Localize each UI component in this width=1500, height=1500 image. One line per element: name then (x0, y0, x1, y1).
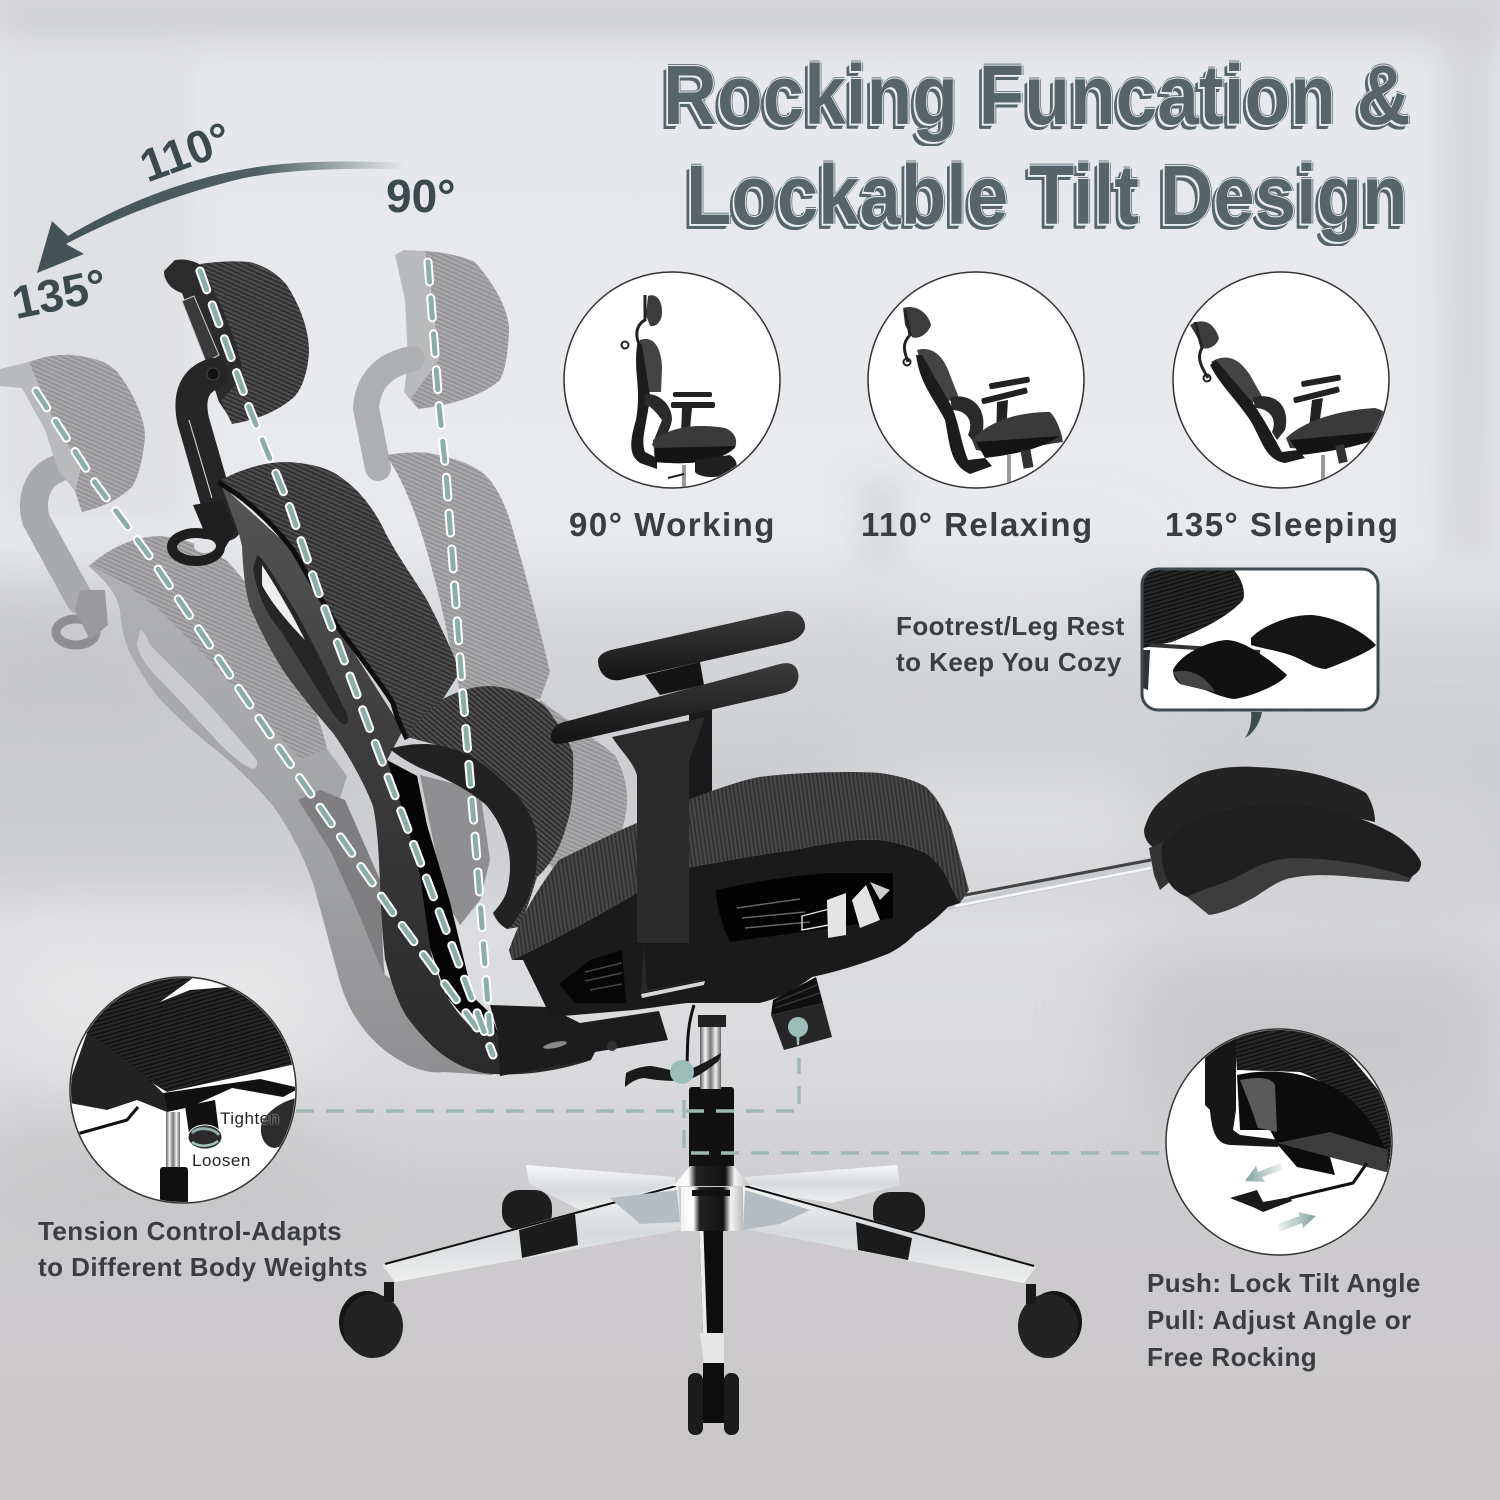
ghost frame 135 (87, 565, 493, 1075)
ghost lumbar 90 (520, 700, 627, 880)
tilt caption: Pull: Adjust Angle or (1147, 1305, 1412, 1335)
front caster (688, 1373, 703, 1435)
tension caption (38, 1216, 368, 1282)
rear right leg (745, 1165, 900, 1203)
ghost neck 90 (366, 359, 412, 468)
caption: working: 90° Working (569, 506, 776, 543)
dashed guide: 110 degree axis (200, 271, 493, 1055)
ghost chair: 90 degree position (366, 250, 627, 925)
back pad (1144, 767, 1375, 848)
headrest bracket (164, 259, 246, 424)
front center leg (698, 1188, 723, 1333)
seat pan (512, 840, 960, 1017)
main chair: 110 degree position (164, 259, 969, 1087)
gas lift and hub (689, 1015, 734, 1182)
inset rod (1150, 645, 1260, 652)
lever marker (670, 1060, 694, 1084)
angle label 110: 110° (133, 112, 238, 192)
title: Rocking Funcation & (663, 48, 1411, 142)
inset seat mesh (86, 978, 292, 1092)
inset right pad (1251, 615, 1376, 669)
front armrest post (612, 717, 705, 993)
ghost knob 135 (56, 590, 108, 645)
tension caption: Tension Control-Adapts (38, 1216, 342, 1246)
inset pan (1237, 1072, 1392, 1175)
ghost bracket 135 (0, 362, 82, 491)
rotation arrow (37, 161, 404, 273)
collar (698, 1015, 726, 1027)
caption: relaxing: 110° Relaxing (861, 506, 1094, 543)
mini chair circle: 135 degrees (1173, 272, 1403, 488)
tilt caption (1147, 1268, 1421, 1372)
ghost neck 135 (34, 469, 80, 600)
loosen label: Loosen (192, 1151, 251, 1170)
callout tail (1245, 712, 1262, 738)
tension knob marker (788, 1017, 808, 1045)
front right leg (740, 1183, 1036, 1283)
adjustment knob (172, 500, 236, 561)
push arrow (1245, 1163, 1283, 1182)
inset cable (77, 1107, 138, 1134)
ghost headrest 90 (411, 251, 509, 409)
seat bracket (490, 1005, 668, 1076)
leader lines (296, 1058, 1165, 1153)
tilt caption: Free Rocking (1147, 1342, 1317, 1372)
ghost backrest 90 (386, 452, 550, 700)
title (48, 48, 1411, 1340)
front pad shell (1180, 840, 1421, 915)
tilt caption: Push: Lock Tilt Angle (1147, 1268, 1421, 1298)
mechanism window (716, 873, 893, 942)
front pad (1162, 805, 1421, 897)
footrest caption: Footrest/Leg Rest (896, 611, 1125, 641)
inset arm post (1205, 1035, 1280, 1147)
frame (218, 482, 591, 1074)
pull arrow (1277, 1212, 1316, 1232)
tension knob (771, 977, 832, 1050)
dashed guide: 135 degree axis (36, 391, 477, 1028)
inset left frame (68, 1033, 167, 1112)
mini chair circle: 90 degrees (564, 272, 780, 489)
second ghost band (298, 790, 384, 975)
ghost lower back (420, 775, 490, 925)
neck (191, 374, 226, 525)
lumbar mesh (407, 686, 573, 929)
black inner band (387, 760, 498, 1033)
inset lever (1230, 1190, 1292, 1212)
inset pole (166, 1112, 180, 1168)
hub (673, 1166, 750, 1186)
footrest caption (896, 611, 1125, 677)
headrest mesh (200, 261, 309, 424)
seat mesh (509, 772, 969, 960)
rear left leg (526, 1165, 675, 1215)
tension caption: to Different Body Weights (38, 1252, 368, 1282)
rear casters (502, 1190, 552, 1230)
front armrest pad (551, 663, 798, 744)
caption: sleeping: 135° Sleeping (1165, 506, 1399, 543)
left front caster (339, 1291, 395, 1353)
tighten label: Tighten (220, 1109, 280, 1128)
vent (559, 950, 626, 1003)
inset adjuster (185, 1100, 219, 1132)
base: rear legs and casters (502, 1165, 925, 1232)
title: Lockable Tilt Design (686, 148, 1408, 242)
footrest callout box (1140, 568, 1378, 738)
footrest pads (1144, 767, 1421, 915)
footrest caption: to Keep You Cozy (896, 647, 1122, 677)
ghost backrest 135 (89, 536, 327, 768)
rear armrest pad (598, 611, 805, 680)
five-star chrome base (339, 1166, 1082, 1435)
inset seat (1140, 568, 1244, 648)
mini chair circle: 110 degrees (868, 272, 1084, 488)
right front caster (1026, 1291, 1082, 1353)
connector (1149, 838, 1172, 890)
tension inset circle (60, 975, 300, 1207)
angle label 90: 90° (386, 170, 456, 222)
ghost headrest 135 (0, 355, 145, 512)
inset seat mesh (1234, 1030, 1391, 1160)
lumbar bracket (390, 744, 537, 929)
inset paddle (260, 1098, 295, 1148)
ghost chair: 135 degree position (0, 355, 493, 1075)
dashed guide: 90 degree axis (428, 262, 490, 1032)
rear armrest post (689, 700, 712, 800)
footrest rod (948, 857, 1151, 910)
inset left pad (1173, 640, 1287, 699)
angle label 135: 135° (7, 258, 111, 329)
inset white wedge (160, 978, 228, 1002)
tilt lever (625, 1005, 721, 1087)
black cylinder (689, 1087, 734, 1182)
chrome piston (700, 1023, 721, 1089)
frame slot (253, 555, 348, 724)
tilt lever inset circle (1166, 1020, 1395, 1255)
inset right frame (163, 1079, 300, 1112)
front left leg (382, 1183, 681, 1282)
height rail (182, 296, 219, 362)
back mesh (218, 462, 460, 739)
